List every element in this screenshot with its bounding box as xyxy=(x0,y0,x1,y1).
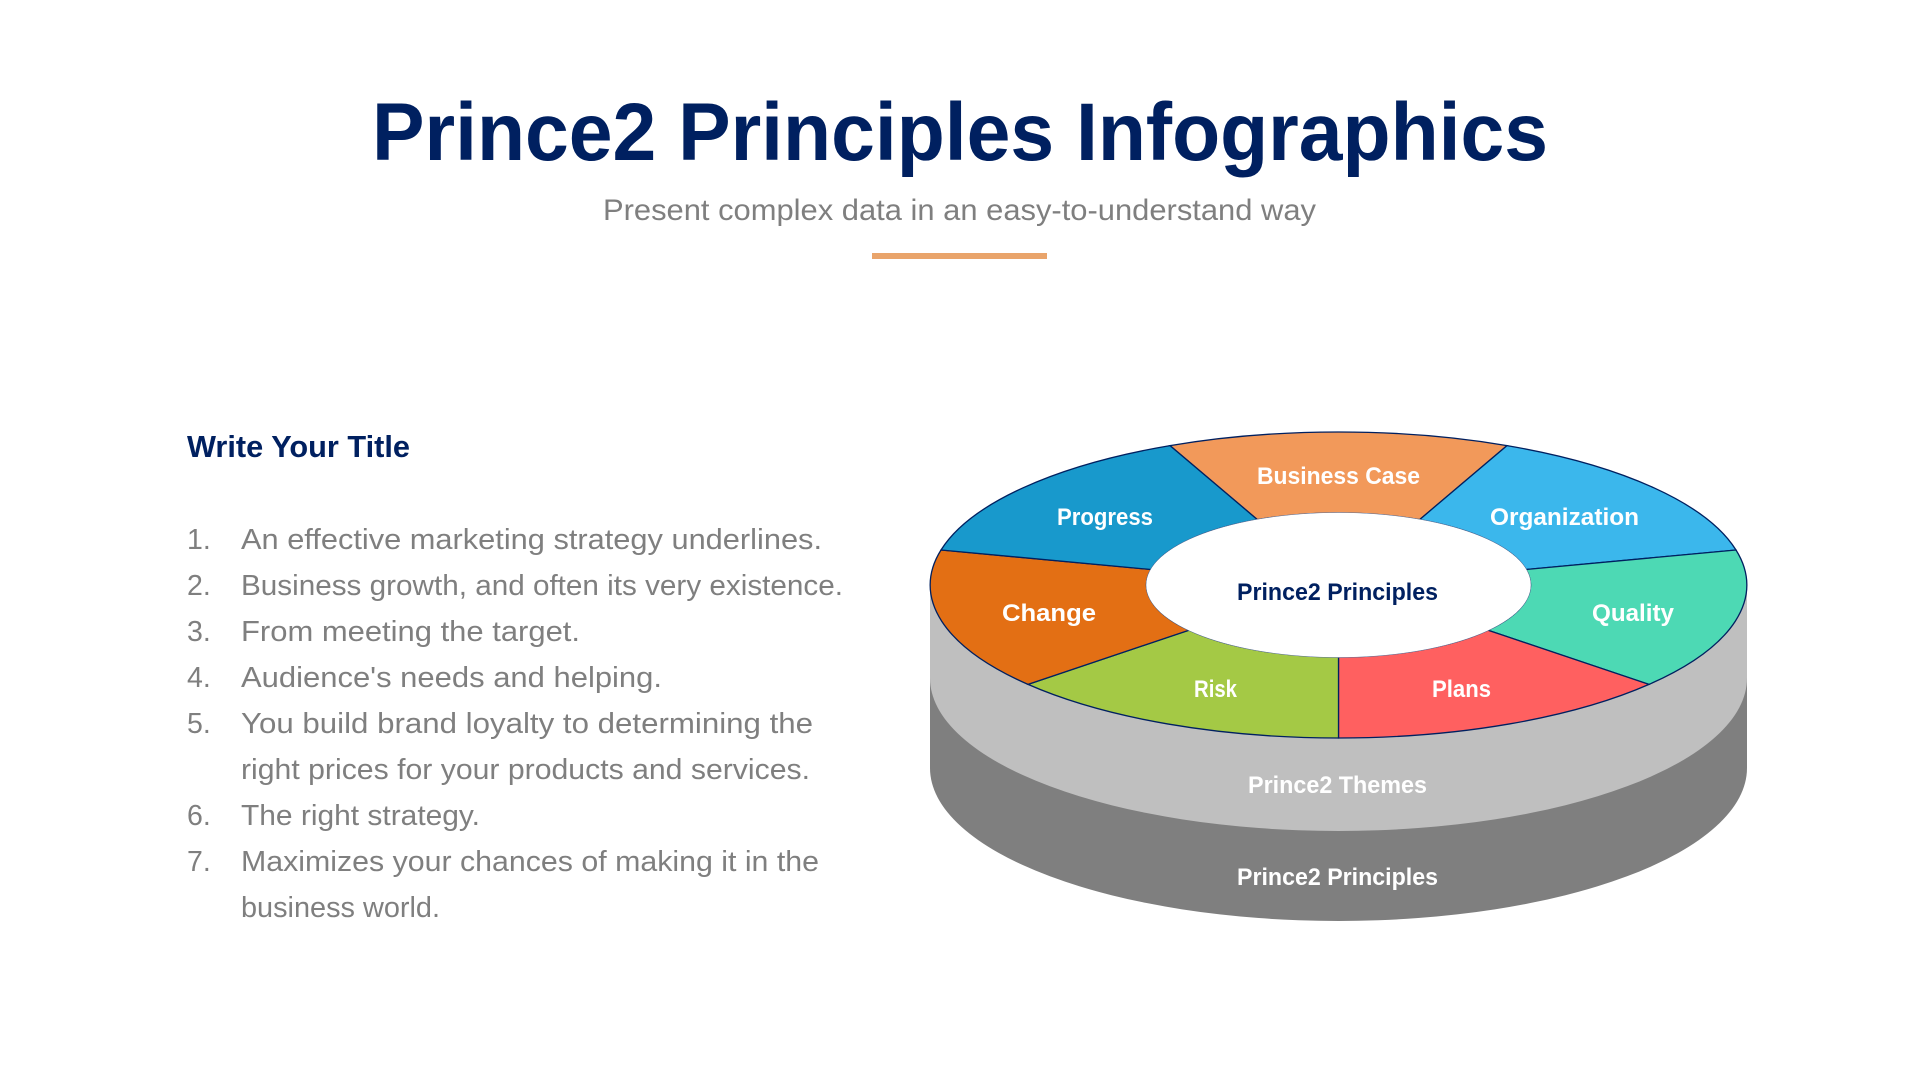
numbered list: right prices for your products and services. xyxy=(241,754,810,786)
sector: Change xyxy=(930,550,1189,684)
numbered list: 1. xyxy=(187,524,211,556)
disc labels: Prince2 Themes xyxy=(1248,772,1427,799)
numbered list: 6. xyxy=(187,800,211,832)
sector: Organization xyxy=(1420,446,1736,570)
numbered list xyxy=(187,524,843,924)
numbered list: Maximizes your chances of making it in the xyxy=(241,846,819,878)
numbered list: 7. xyxy=(187,846,211,878)
disc labels: Business Case xyxy=(1257,463,1420,490)
sector: Plans xyxy=(1338,630,1649,738)
numbered list: Audience's needs and helping. xyxy=(241,662,662,694)
middle layer: Prince2 Themes xyxy=(930,585,1747,831)
subtitle: Present complex data in an easy-to-understand way xyxy=(603,194,1316,227)
disc labels: Risk xyxy=(1194,676,1238,703)
disc labels: Plans xyxy=(1432,676,1491,703)
disc labels: Quality xyxy=(1592,600,1675,627)
left heading: Write Your Title xyxy=(187,429,410,464)
bottom layer: Prince2 Principles xyxy=(930,585,1747,921)
numbered list: You build brand loyalty to determining the xyxy=(241,708,813,740)
sector: Quality xyxy=(1488,550,1747,684)
center hub xyxy=(1146,512,1531,658)
numbered list: From meeting the target. xyxy=(241,616,580,648)
layered disc diagram xyxy=(930,432,1747,921)
disc labels: Organization xyxy=(1490,504,1639,531)
numbered list: The right strategy. xyxy=(241,800,480,832)
title: Prince2 Principles Infographics xyxy=(372,87,1548,178)
numbered list: business world. xyxy=(241,892,440,924)
numbered list: An effective marketing strategy underlines. xyxy=(241,524,822,556)
sector: Progress xyxy=(941,446,1258,570)
numbered list: 2. xyxy=(187,570,211,602)
disc labels: Prince2 Principles xyxy=(1237,579,1438,606)
accent bar xyxy=(872,253,1047,259)
numbered list: 5. xyxy=(187,708,211,740)
numbered list: 3. xyxy=(187,616,211,648)
disc labels: Prince2 Principles xyxy=(1237,864,1438,891)
disc labels: Progress xyxy=(1057,504,1153,531)
disc labels xyxy=(1002,463,1675,891)
sector: Risk xyxy=(1028,630,1338,738)
numbered list: Business growth, and often its very existence. xyxy=(241,570,843,602)
sector: Business Case xyxy=(1170,432,1507,520)
numbered list: 4. xyxy=(187,662,211,694)
disc labels: Change xyxy=(1002,600,1096,627)
